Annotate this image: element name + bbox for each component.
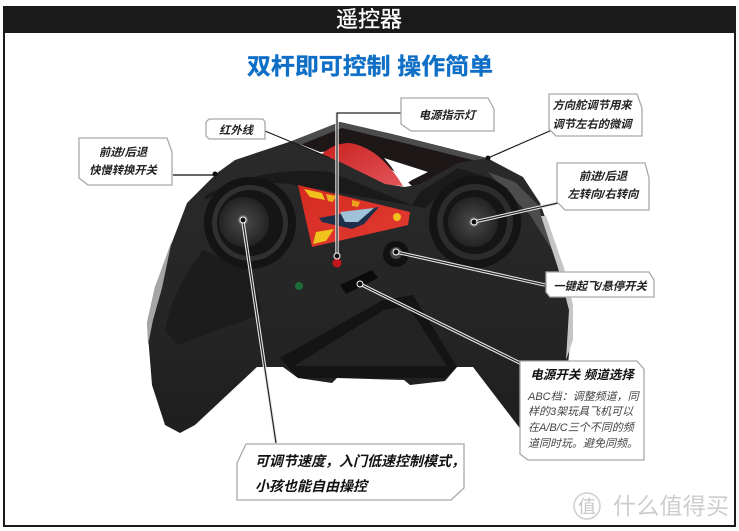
left grip panel <box>165 250 262 345</box>
callout: 可调节速度: 小孩也能自由操控 <box>255 478 369 494</box>
watermark: 值 <box>578 497 596 517</box>
callout: 电源开关 频道选择: 在A/B/C三个不同的频 <box>528 421 636 434</box>
callout: 一键起飞/悬停开关 <box>393 249 654 297</box>
red dome <box>322 143 403 186</box>
silver edge right <box>541 216 573 360</box>
callout: 红外线 <box>206 119 330 158</box>
right joystick <box>429 176 521 268</box>
red sticker <box>298 185 410 247</box>
callout: 方向舵调节: 方向舵调节用来 <box>552 99 633 112</box>
callout: 前进/后退 左转向/右转向: 左转向/右转向 <box>568 188 640 201</box>
callout: 电源指示灯 <box>334 98 494 259</box>
takeoff button <box>383 241 409 267</box>
callout: 一键起飞/悬停开关: 一键起飞/悬停开关 <box>553 280 647 293</box>
callout: 前进/后退 快慢转换开关 <box>79 138 218 185</box>
power indicator led <box>332 258 342 268</box>
callout: 前进/后退 快慢转换开关: 前进/后退 <box>99 146 149 159</box>
handle window gap <box>384 158 428 186</box>
left joystick <box>204 177 296 269</box>
callout: 方向舵调节: 调节左右的微调 <box>552 118 633 131</box>
remote controller <box>147 122 573 435</box>
callout: 电源开关 频道选择: 样的3架玩具飞机可以 <box>528 405 634 418</box>
callout: 前进/后退 左转向/右转向 <box>471 163 649 225</box>
battery cover <box>280 295 457 378</box>
callout: 可调节速度: 可调节速度，入门低速控制模式， <box>255 453 465 469</box>
callout: 红外线: 红外线 <box>219 124 255 137</box>
callout: 电源开关 频道选择: 道同时玩。避免同频。 <box>528 437 638 450</box>
green led <box>295 282 303 290</box>
callout: 方向舵调节 <box>486 94 642 160</box>
callout: 前进/后退 快慢转换开关: 快慢转换开关 <box>89 164 158 177</box>
callout: 电源开关 频道选择: ABC档：调整频道，同 <box>527 390 641 403</box>
callout: 电源指示灯: 电源指示灯 <box>419 109 478 122</box>
handle top edge <box>292 122 487 163</box>
main heading: 双杆即可控制 操作简单 <box>247 53 493 79</box>
callout: 可调节速度 <box>237 217 465 500</box>
power switch <box>340 270 378 294</box>
header title: 遥控器 <box>336 7 402 32</box>
controller body <box>147 141 573 435</box>
silver edge left <box>147 240 172 345</box>
callout: 前进/后退 左转向/右转向: 前进/后退 <box>579 170 629 183</box>
upper shoulder shade <box>205 168 510 208</box>
watermark: 什么值得买 <box>613 493 729 519</box>
header bar <box>3 6 736 33</box>
grey shoulder right <box>488 172 552 250</box>
handle rear <box>292 122 505 198</box>
callout: 电源开关 频道选择: 电源开关 频道选择 <box>530 368 635 382</box>
callout: 电源开关 频道选择 <box>357 281 644 460</box>
